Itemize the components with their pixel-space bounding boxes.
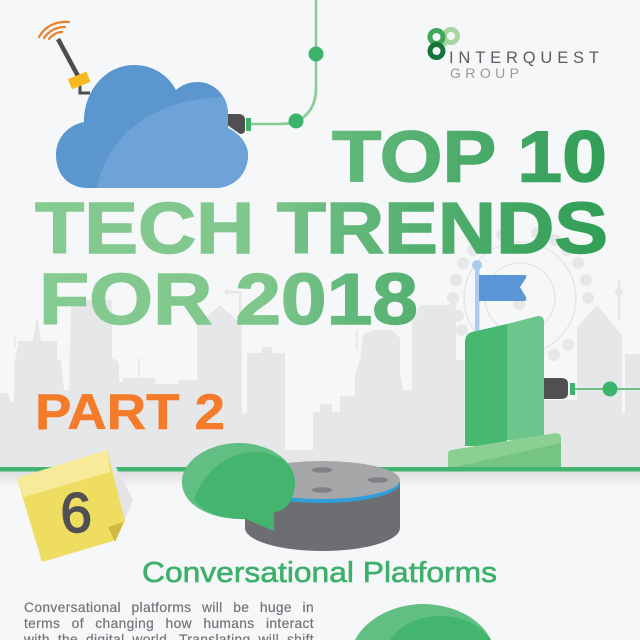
connector (544, 378, 640, 399)
flag (472, 260, 526, 336)
second speech bubble (355, 604, 491, 640)
body text: terms of changing how humans interact (24, 616, 314, 631)
logo: Interquest Group (430, 30, 599, 81)
sticky note number 6: 6 (59, 480, 93, 545)
connector cable from cloud (246, 0, 324, 131)
title: Top 10 Tech Trends for 2018: TOP 10 (332, 118, 607, 198)
logo: Interquest Group: INTERQUEST (449, 49, 599, 67)
icon: cloud with antenna (39, 22, 260, 190)
icon: flag tower with plug (448, 260, 640, 467)
heading: conversational platforms: Conversational Platforms (142, 557, 497, 589)
plug (226, 114, 245, 134)
green divider line (0, 467, 640, 472)
smart speaker (244, 461, 400, 551)
antenna (39, 22, 91, 93)
title: Top 10 Tech Trends for 2018: FOR 2018 (39, 260, 418, 340)
title: Top 10 Tech Trends for 2018: TECH TRENDS (35, 189, 608, 269)
speech bubble (182, 443, 295, 531)
ferris wheel (447, 227, 594, 361)
skyline silhouette (0, 280, 640, 467)
body text: Conversational platforms will be huge in (24, 600, 314, 615)
body text (24, 600, 314, 640)
title: Top 10 Tech Trends for 2018 (35, 118, 608, 340)
divider shadow band (0, 471, 640, 487)
logo: Interquest Group: GROUP (450, 65, 519, 81)
subtitle: part 2: PART 2 (35, 384, 225, 440)
sticky note number 6 (17, 450, 133, 562)
